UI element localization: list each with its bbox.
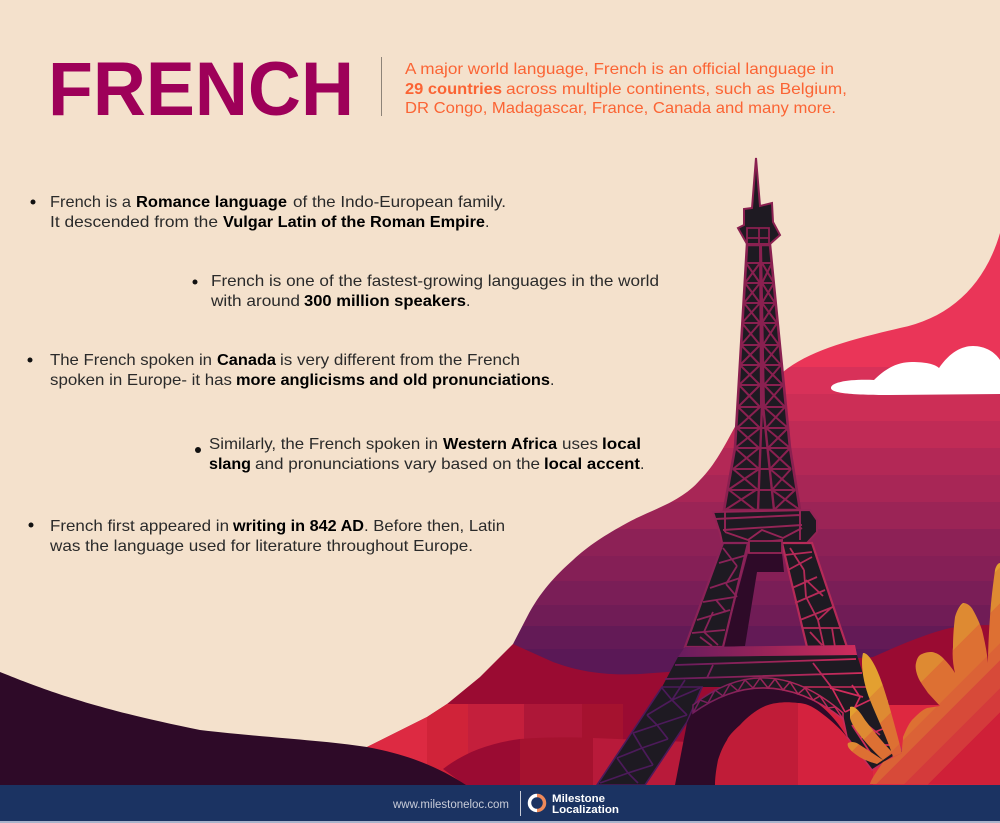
- bullet: fastest-growing: [192, 273, 659, 310]
- bullet: fastest-growing: French is one of the fastest-growing languages in the world: [211, 273, 659, 290]
- bullet: 842 AD: . Before then, Latin: [364, 518, 505, 535]
- bullet: Western Africa: and pronunciations vary based on the: [255, 456, 540, 473]
- illustration: orange foliage: [848, 563, 1000, 785]
- bullet: Romance language: French is a: [50, 194, 131, 211]
- bullet: Canada: [28, 352, 554, 389]
- tower: upper section: [724, 228, 800, 510]
- bullet: Canada: more anglicisms and old pronunciations: [236, 372, 550, 389]
- intro text: A major world language, French is an official language in: [405, 61, 834, 78]
- leaf: [850, 707, 893, 760]
- illustration: dark hill: [0, 672, 466, 785]
- bullet: Romance language: It descended from the: [50, 214, 218, 231]
- intro text: across multiple continents, such as Belgium,: [506, 81, 847, 98]
- tower: spire and top: [738, 158, 780, 244]
- bullet: fastest-growing: .: [466, 293, 470, 310]
- illustration: red ground: [360, 620, 1000, 790]
- bullet: Western Africa: [195, 436, 644, 473]
- bush: [870, 563, 1000, 785]
- bullet: Western Africa: local: [602, 436, 641, 453]
- bullet: Canada: .: [550, 372, 554, 389]
- tower: first platform: [713, 510, 817, 547]
- bullet: Western Africa: Similarly, the French spoken in: [209, 436, 438, 453]
- bullet: fastest-growing: 300 million speakers: [304, 293, 466, 310]
- bullet: 842 AD: [28, 518, 505, 555]
- bullet: Canada: is very different from the French: [280, 352, 520, 369]
- intro text: DR Congo, Madagascar, France, Canada and many more.: [405, 100, 836, 117]
- tower: lower right leg: [800, 685, 903, 770]
- bullet: 842 AD: French first appeared in: [50, 518, 229, 535]
- tower: lower left leg: [597, 680, 702, 785]
- header: [48, 47, 847, 132]
- leaf: [862, 653, 902, 757]
- title: FRENCH: [48, 47, 354, 132]
- logo text: Milestone: [552, 793, 605, 805]
- illustration: sunset sky bands: [500, 220, 1000, 690]
- illustration: cloud: [831, 346, 1000, 395]
- bullet: Western Africa: uses: [562, 436, 598, 453]
- illustration: Eiffel Tower: [597, 158, 903, 785]
- bullet: 842 AD: was the language used for literature throughout Europe.: [49, 538, 473, 555]
- tower: middle legs: [685, 541, 847, 647]
- intro text: 29 countries: [405, 81, 502, 98]
- bullet: Western Africa: .: [640, 456, 644, 473]
- bullet: Canada: The French spoken in: [50, 352, 212, 369]
- logo text: Localization: [552, 804, 619, 816]
- footer url: www.milestoneloc.com: [392, 799, 509, 811]
- tower: main arch: [675, 678, 847, 785]
- bullet: Romance language: Vulgar Latin of the Roman Empire: [223, 214, 485, 231]
- bullet: Western Africa: slang: [209, 456, 251, 473]
- footer: [0, 785, 1000, 823]
- leaf: [848, 742, 883, 764]
- bullet: Romance language: Romance language: [136, 194, 287, 211]
- bullet: 842 AD: writing in 842 AD: [232, 518, 364, 535]
- bullet: Romance language: .: [485, 214, 489, 231]
- bullet: Canada: spoken in Europe- it has: [50, 372, 232, 389]
- bullet: Western Africa: local accent: [544, 456, 641, 473]
- tower: second platform: [662, 645, 867, 688]
- bullet: fastest-growing: with around: [210, 293, 300, 310]
- logo icon: [530, 796, 545, 810]
- bullet: Western Africa: Western Africa: [443, 436, 557, 453]
- header divider: [381, 57, 382, 116]
- bullet: Romance language: [30, 194, 506, 231]
- bullet: Canada: Canada: [217, 352, 276, 369]
- bullet: Romance language: of the Indo-European family.: [293, 194, 506, 211]
